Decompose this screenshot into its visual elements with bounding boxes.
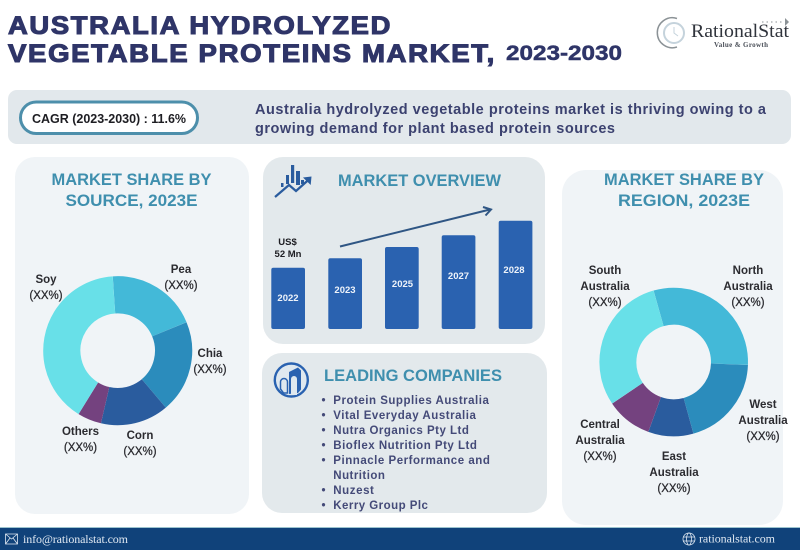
- company list: Bioflex Nutrition Pty Ltd: [333, 440, 477, 452]
- footer bar: [0, 527, 800, 550]
- label: South Australia: (XX%): [588, 297, 622, 309]
- label: East Australia: Australia: [649, 467, 699, 479]
- CAGR banner: [8, 90, 791, 144]
- heading: leading companies: LEADING COMPANIES: [324, 367, 502, 385]
- label: Corn: Corn: [127, 430, 153, 442]
- heading: region: REGION, 2023E: [618, 192, 750, 210]
- company list: Nuzest: [333, 485, 374, 497]
- label: Others: (XX%): [64, 442, 97, 454]
- label: South Australia: Australia: [580, 281, 630, 293]
- banner description: growing demand for plant based protein sources: [255, 121, 615, 137]
- label: South Australia: [580, 265, 630, 309]
- icon: globe: [683, 533, 695, 545]
- panel: leading companies: [262, 353, 547, 513]
- icon: buildings: [275, 364, 308, 396]
- banner description: Australia hydrolyzed vegetable proteins market is thriving owing to a: [255, 102, 767, 118]
- label: Chia: Chia: [198, 348, 223, 360]
- title: AUSTRALIA HYDROLYZED: [8, 12, 392, 40]
- heading: source: [52, 171, 212, 210]
- label: Corn: [123, 430, 157, 458]
- label: East Australia: [649, 451, 699, 495]
- value label: US$ 52 Mn: [275, 237, 302, 260]
- CAGR pill: [20, 102, 198, 134]
- label: North Australia: North: [733, 265, 763, 277]
- heading: region: MARKET SHARE BY: [604, 171, 764, 189]
- bar 2023: 2023: [334, 285, 356, 296]
- label: Central Australia: Central: [580, 419, 620, 431]
- label: Central Australia: (XX%): [583, 451, 617, 463]
- label: West Australia: West: [749, 399, 777, 411]
- company list: [322, 395, 490, 512]
- icon: growth chart: [275, 165, 312, 197]
- label: Soy: (XX%): [29, 290, 63, 302]
- heading: market overview: MARKET OVERVIEW: [338, 172, 501, 190]
- label: West Australia: (XX%): [746, 431, 780, 443]
- donut chart: region: [596, 285, 751, 439]
- label: North Australia: Australia: [723, 281, 773, 293]
- title: [8, 12, 622, 68]
- label: Pea: [164, 264, 198, 292]
- label: Chia: (XX%): [193, 364, 227, 376]
- heading: region: [604, 171, 764, 210]
- company list: Protein Supplies Australia: [333, 395, 489, 407]
- panel: market share by source: [15, 157, 249, 514]
- label: South Australia: South: [589, 265, 621, 277]
- arrow: growth trend: [340, 207, 491, 246]
- company list: Vital Everyday Australia: [333, 410, 476, 422]
- label: Soy: Soy: [35, 274, 57, 286]
- logo: RationalStat: Value & Growth: [714, 41, 768, 49]
- company list: •: [322, 425, 326, 437]
- bar 2025: [385, 247, 419, 329]
- bar chart: [271, 221, 532, 329]
- label: Others: [62, 426, 99, 454]
- company list: •: [322, 500, 326, 512]
- heading: source: MARKET SHARE BY: [52, 171, 212, 189]
- label: Pea: Pea: [171, 264, 192, 276]
- value label: US$ 52 Mn: 52 Mn: [275, 249, 302, 260]
- logo: RationalStat: [657, 18, 790, 49]
- bar 2023: [328, 258, 362, 329]
- company list: •: [322, 455, 326, 467]
- logo: RationalStat: RationalStat: [691, 21, 790, 42]
- bar 2028: 2028: [503, 265, 525, 276]
- company list: Pinnacle Performance and: [333, 455, 490, 467]
- label: Pea: (XX%): [164, 280, 198, 292]
- heading: source: SOURCE, 2023E: [66, 192, 198, 210]
- bar 2028: [499, 221, 532, 329]
- panel: market share by region: [562, 170, 788, 525]
- bar 2025: 2025: [392, 279, 414, 290]
- value label: US$ 52 Mn: US$: [278, 237, 297, 248]
- company list: •: [322, 485, 326, 497]
- label: Others: Others: [62, 426, 99, 438]
- title: 2023-2030: [506, 42, 622, 65]
- icon: envelope: [6, 534, 18, 544]
- label: Chia: [193, 348, 227, 376]
- label: Corn: (XX%): [123, 446, 157, 458]
- label: East Australia: East: [662, 451, 686, 463]
- company list: •: [322, 440, 326, 452]
- label: Soy: [29, 274, 63, 302]
- panel: market overview: [263, 157, 545, 344]
- bar 2027: 2027: [448, 271, 469, 282]
- banner description: [255, 102, 767, 137]
- donut chart: source: [39, 272, 196, 429]
- label: West Australia: [738, 399, 788, 443]
- company list: Kerry Group Plc: [333, 500, 428, 512]
- company list: •: [322, 410, 326, 422]
- company list: Nutra Organics Pty Ltd: [333, 425, 469, 437]
- company list: Nutrition: [333, 470, 385, 482]
- title: VEGETABLE PROTEINS MARKET,: [8, 40, 496, 68]
- company list: •: [322, 395, 326, 407]
- label: Central Australia: [575, 419, 625, 463]
- label: Central Australia: Australia: [575, 435, 625, 447]
- footer website: rationalstat.com: [699, 532, 776, 546]
- label: North Australia: (XX%): [731, 297, 765, 309]
- label: East Australia: (XX%): [657, 483, 691, 495]
- bar 2022: 2022: [277, 293, 299, 304]
- label: North Australia: [723, 265, 773, 309]
- label: West Australia: Australia: [738, 415, 788, 427]
- bar 2022: [271, 268, 305, 329]
- footer email: info@rationalstat.com: [23, 532, 129, 546]
- bar 2027: [442, 235, 475, 329]
- CAGR pill: CAGR (2023-2030) : 11.6%: [32, 112, 186, 126]
